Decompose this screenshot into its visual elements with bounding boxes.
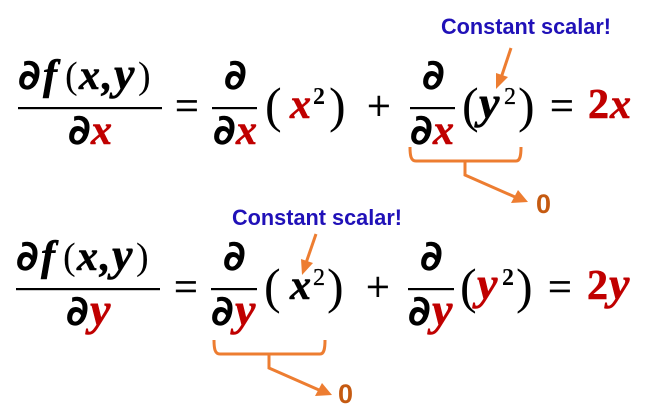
plus sign: + <box>367 84 391 130</box>
fraction: d over dy: y <box>230 284 256 335</box>
fraction: df(x,y) over dx: x <box>78 53 100 99</box>
fraction: df(x,y) over dy: ) <box>136 236 149 278</box>
result: zero, second equation: 0 <box>338 379 353 409</box>
fraction: df(x,y) over dy: f <box>41 234 59 280</box>
term: y squared in parentheses: 2 <box>502 265 514 291</box>
callout: constant scalar, second equation: Constant scalar! <box>232 205 402 230</box>
callout: constant scalar, first equation: Constant scalar! <box>441 14 611 39</box>
equals sign: = <box>174 265 198 311</box>
fraction: df(x,y) over dx: ∂ <box>18 50 41 99</box>
fraction: d over dx, second term <box>410 50 455 154</box>
arrow: callout to y squared <box>496 48 511 89</box>
fraction: df(x,y) over dy: y <box>85 284 111 335</box>
term: x squared in parentheses: 2 <box>313 265 325 291</box>
result: zero, first equation: 0 <box>536 189 551 219</box>
term: x squared in parentheses: ) <box>327 258 344 314</box>
fraction: df(x,y) over dy: y <box>107 229 133 280</box>
equals sign: = <box>550 84 574 130</box>
fraction: d over dy <box>211 231 257 335</box>
fraction: df(x,y) over dx <box>18 48 162 154</box>
result: 2y: y <box>604 258 630 309</box>
equation: partial derivative with respect to x <box>18 48 631 154</box>
fraction: df(x,y) over dy: , <box>99 234 110 280</box>
term: y squared in parentheses: ) <box>518 77 535 133</box>
brace and arrow to zero, first equation <box>410 147 528 203</box>
equation: partial derivative with respect to y <box>16 229 630 335</box>
fraction: d over dy, second term: ∂ <box>420 231 443 280</box>
fraction: d over dx: ∂ <box>224 50 247 99</box>
result: 2x: 2 <box>588 82 609 128</box>
fraction: df(x,y) over dx: f <box>43 53 61 99</box>
term: x squared in parentheses: ( <box>264 258 281 314</box>
fraction: df(x,y) over dy: x <box>76 234 98 280</box>
term: x squared in parentheses: ) <box>329 77 346 133</box>
fraction: d over dy, second term: ∂ <box>408 286 431 335</box>
fraction: df(x,y) over dx: ∂ <box>68 105 91 154</box>
term: y squared in parentheses <box>460 258 533 314</box>
term: x squared in parentheses: 2 <box>313 84 325 110</box>
fraction: d over dx <box>212 50 257 154</box>
term: x squared in parentheses: x <box>289 263 311 309</box>
term: y squared in parentheses <box>462 77 535 133</box>
equals sign: = <box>548 265 572 311</box>
fraction: df(x,y) over dx: ( <box>65 55 78 97</box>
fraction: d over dy, second term <box>408 231 454 335</box>
arrow: callout to x squared <box>301 234 316 275</box>
result: 2y: 2 <box>587 263 608 309</box>
fraction: d over dx, second term: x <box>432 108 454 154</box>
term: y squared in parentheses: ) <box>516 258 533 314</box>
fraction: df(x,y) over dy <box>16 229 160 335</box>
fraction: d over dx: x <box>235 108 257 154</box>
term: x squared in parentheses <box>264 258 344 314</box>
fraction: d over dx, second term: ∂ <box>410 105 433 154</box>
term: y squared in parentheses: ( <box>462 77 479 133</box>
term: y squared in parentheses: y <box>474 77 500 128</box>
plus sign: + <box>366 265 390 311</box>
equals sign: = <box>175 84 199 130</box>
fraction: d over dy: ∂ <box>211 286 234 335</box>
result: 2y <box>587 258 630 309</box>
term: x squared in parentheses: ( <box>265 77 282 133</box>
fraction: df(x,y) over dy: ∂ <box>16 231 39 280</box>
fraction: d over dx: ∂ <box>213 105 236 154</box>
fraction: df(x,y) over dy: ∂ <box>66 286 89 335</box>
result: 2x <box>588 82 631 128</box>
term: x squared in parentheses <box>265 77 346 133</box>
term: y squared in parentheses: 2 <box>504 84 516 110</box>
fraction: df(x,y) over dy: ( <box>63 236 76 278</box>
fraction: d over dx, second term: ∂ <box>422 50 445 99</box>
term: y squared in parentheses: ( <box>460 258 477 314</box>
result: 2x: x <box>609 82 631 128</box>
fraction: d over dy: ∂ <box>223 231 246 280</box>
fraction: df(x,y) over dx: x <box>90 108 112 154</box>
fraction: df(x,y) over dx: ) <box>138 55 151 97</box>
brace and arrow to zero, second equation <box>214 340 332 396</box>
term: y squared in parentheses: y <box>472 258 498 309</box>
fraction: d over dy, second term: y <box>427 284 453 335</box>
fraction: df(x,y) over dx: , <box>101 53 112 99</box>
term: x squared in parentheses: x <box>289 82 311 128</box>
fraction: df(x,y) over dx: y <box>109 48 135 99</box>
